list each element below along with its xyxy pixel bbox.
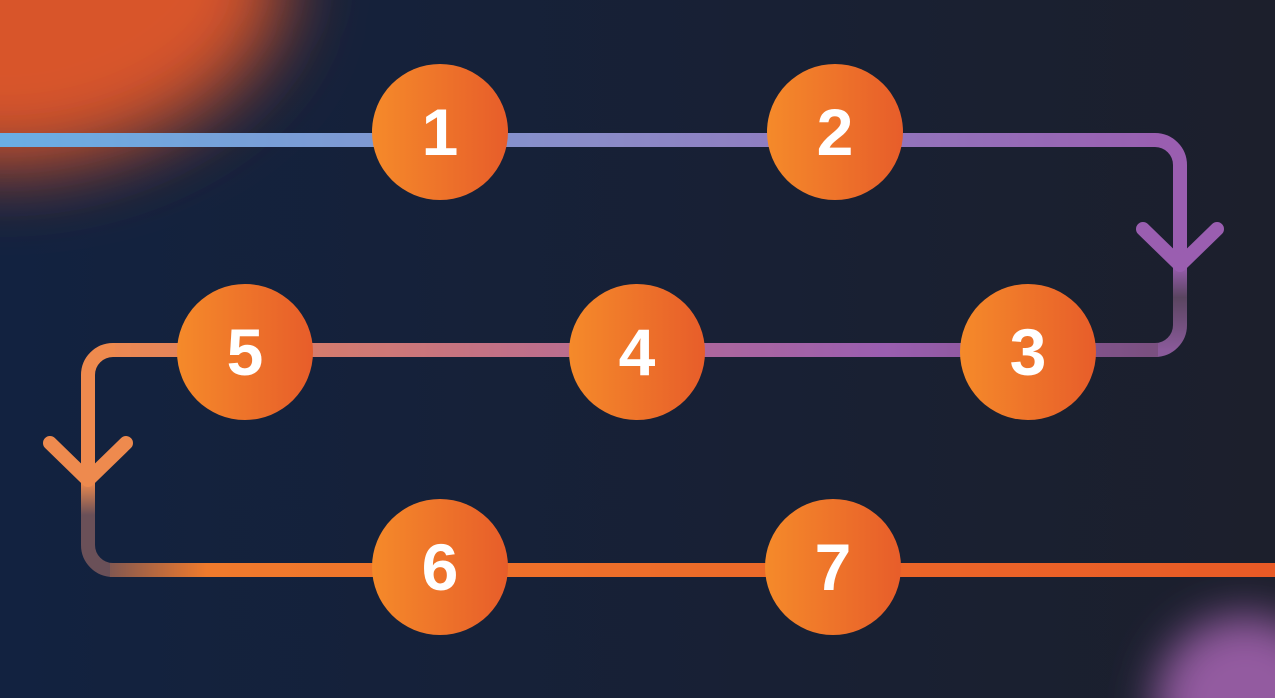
step 2 <box>767 64 903 200</box>
step 5 <box>177 284 313 420</box>
decorative orange blob top-left <box>0 0 318 215</box>
step 6: 6 <box>422 530 458 604</box>
step 3: 3 <box>1010 315 1046 389</box>
step 5: 5 <box>227 315 263 389</box>
step 2: 2 <box>817 95 853 169</box>
step 1 <box>372 64 508 200</box>
step 3 <box>960 284 1096 420</box>
step 7: 7 <box>815 530 851 604</box>
step 7 <box>765 499 901 635</box>
path row 3 <box>110 563 1275 577</box>
path row 1 <box>0 140 1180 350</box>
step 4 <box>569 284 705 420</box>
decorative purple blob bottom-right <box>1155 615 1275 698</box>
step 1: 1 <box>422 95 458 169</box>
step 4: 4 <box>619 315 656 389</box>
path row 2 <box>88 350 1158 570</box>
step 6 <box>372 499 508 635</box>
arrow: down left <box>50 443 126 480</box>
arrow: down right <box>1143 229 1217 265</box>
